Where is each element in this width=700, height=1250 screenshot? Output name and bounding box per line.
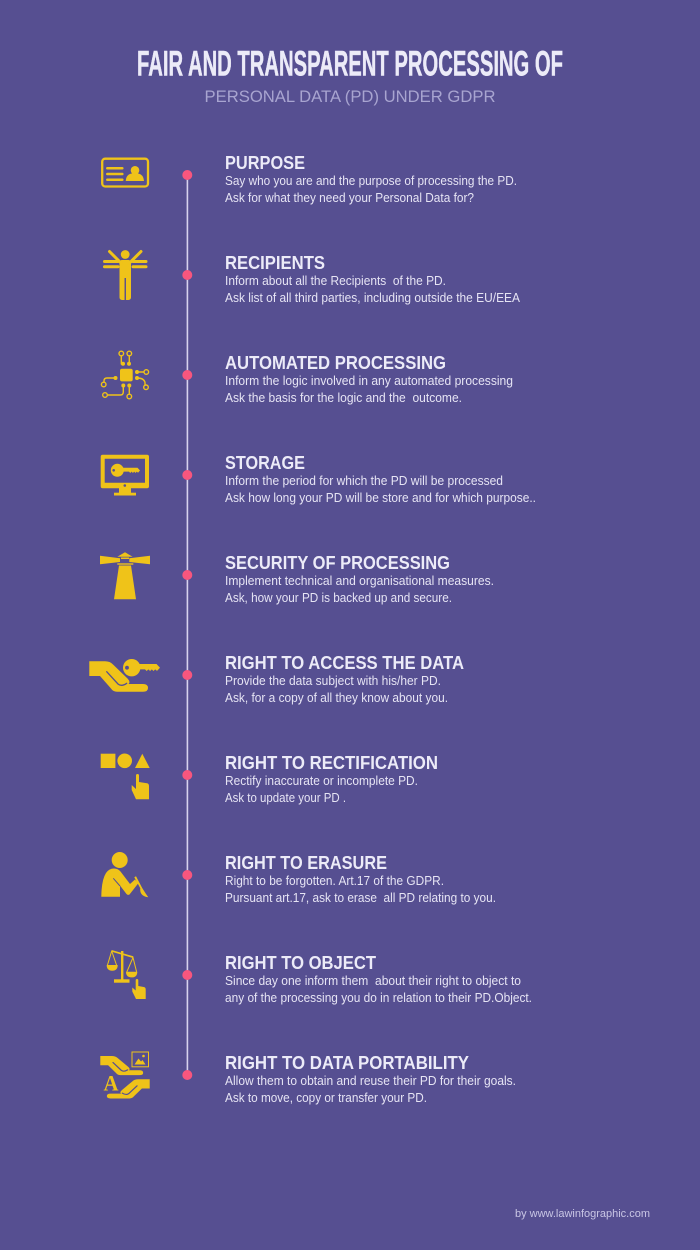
- heading: RIGHT TO RECTIFICATION: [225, 753, 438, 773]
- row: security of processing: [100, 552, 494, 605]
- icon: person erasing with brush: [101, 852, 148, 897]
- row: right to access the data: [89, 653, 464, 705]
- timeline dot: [182, 670, 192, 680]
- description: Ask to update your PD .: [225, 791, 346, 805]
- heading: SECURITY OF PROCESSING: [225, 553, 450, 573]
- description: Say who you are and the purpose of processing the PD.: [225, 174, 517, 188]
- heading: STORAGE: [225, 453, 305, 473]
- timeline dot: [182, 870, 192, 880]
- row: storage: [101, 453, 536, 505]
- icon: shapes with pointing hand: [101, 754, 150, 799]
- timeline dot: [182, 270, 192, 280]
- description: [225, 374, 513, 405]
- subtitle: PERSONAL DATA (PD) UNDER GDPR: [204, 88, 496, 106]
- description: Right to be forgotten. Art.17 of the GDPR.: [225, 874, 444, 888]
- timeline dot: [182, 570, 192, 580]
- icon: lighthouse: [100, 552, 150, 599]
- row: right to erasure: [101, 852, 496, 905]
- icon: circuit chip: [101, 351, 149, 399]
- description: Ask for what they need your Personal Data for?: [225, 191, 474, 205]
- description: Allow them to obtain and reuse their PD for their goals.: [225, 1074, 516, 1088]
- timeline dot: [182, 1070, 192, 1080]
- description: [225, 474, 536, 505]
- footer credit: by www.lawinfographic.com: [515, 1208, 650, 1220]
- icon: scales with pointing hand: [107, 950, 146, 999]
- heading: PURPOSE: [225, 153, 305, 173]
- timeline line: [187, 175, 188, 1075]
- description: Inform the logic involved in any automated processing: [225, 374, 513, 388]
- row: automated processing: [101, 351, 513, 405]
- description: Inform about all the Recipients of the PD.: [225, 274, 446, 288]
- timeline dot: [182, 970, 192, 980]
- row: recipients: [104, 250, 521, 305]
- description: [225, 174, 517, 205]
- description: Ask, for a copy of all they know about you.: [225, 691, 448, 705]
- heading: RECIPIENTS: [225, 253, 325, 273]
- heading: RIGHT TO ERASURE: [225, 853, 387, 873]
- row: right to object: [107, 950, 532, 1005]
- description: [225, 874, 496, 905]
- description: Provide the data subject with his/her PD.: [225, 674, 441, 688]
- description: [225, 674, 448, 705]
- heading: RIGHT TO DATA PORTABILITY: [225, 1053, 469, 1073]
- description: Ask the basis for the logic and the outcome.: [225, 391, 462, 405]
- description: Since day one inform them about their right to object to: [225, 974, 521, 988]
- description: Ask, how your PD is backed up and secure.: [225, 591, 452, 605]
- row: right to rectification: [101, 753, 438, 805]
- description: Rectify inaccurate or incomplete PD.: [225, 774, 418, 788]
- row: purpose: [102, 153, 517, 205]
- icon: hands exchanging image and letter: A: [104, 1070, 119, 1096]
- heading: RIGHT TO ACCESS THE DATA: [225, 653, 464, 673]
- icon: monitor with key: [101, 455, 149, 496]
- icon: id card: [102, 159, 148, 186]
- description: [225, 774, 418, 805]
- icon: hands exchanging image and letter: [100, 1052, 150, 1098]
- description: Ask how long your PD will be store and for which purpose..: [225, 491, 536, 505]
- heading: RIGHT TO OBJECT: [225, 953, 376, 973]
- timeline dot: [182, 370, 192, 380]
- description: [225, 1074, 516, 1105]
- timeline dot: [182, 470, 192, 480]
- timeline dot: [182, 770, 192, 780]
- description: Ask list of all third parties, including outside the EU/EEA: [225, 291, 521, 305]
- description: Pursuant art.17, ask to erase all PD relating to you.: [225, 891, 496, 905]
- icon: hand receiving key: [89, 659, 160, 692]
- timeline dot: [182, 170, 192, 180]
- icon: person with many arms: [104, 250, 146, 301]
- description: Inform the period for which the PD will be processed: [225, 474, 503, 488]
- description: [225, 574, 494, 605]
- heading: AUTOMATED PROCESSING: [225, 353, 446, 373]
- description: Ask to move, copy or transfer your PD.: [225, 1091, 427, 1105]
- description: Implement technical and organisational measures.: [225, 574, 494, 588]
- description: [225, 274, 521, 305]
- description: any of the processing you do in relation to their PD.Object.: [225, 991, 532, 1005]
- description: [225, 974, 532, 1005]
- row: right to data portability: [100, 1052, 516, 1105]
